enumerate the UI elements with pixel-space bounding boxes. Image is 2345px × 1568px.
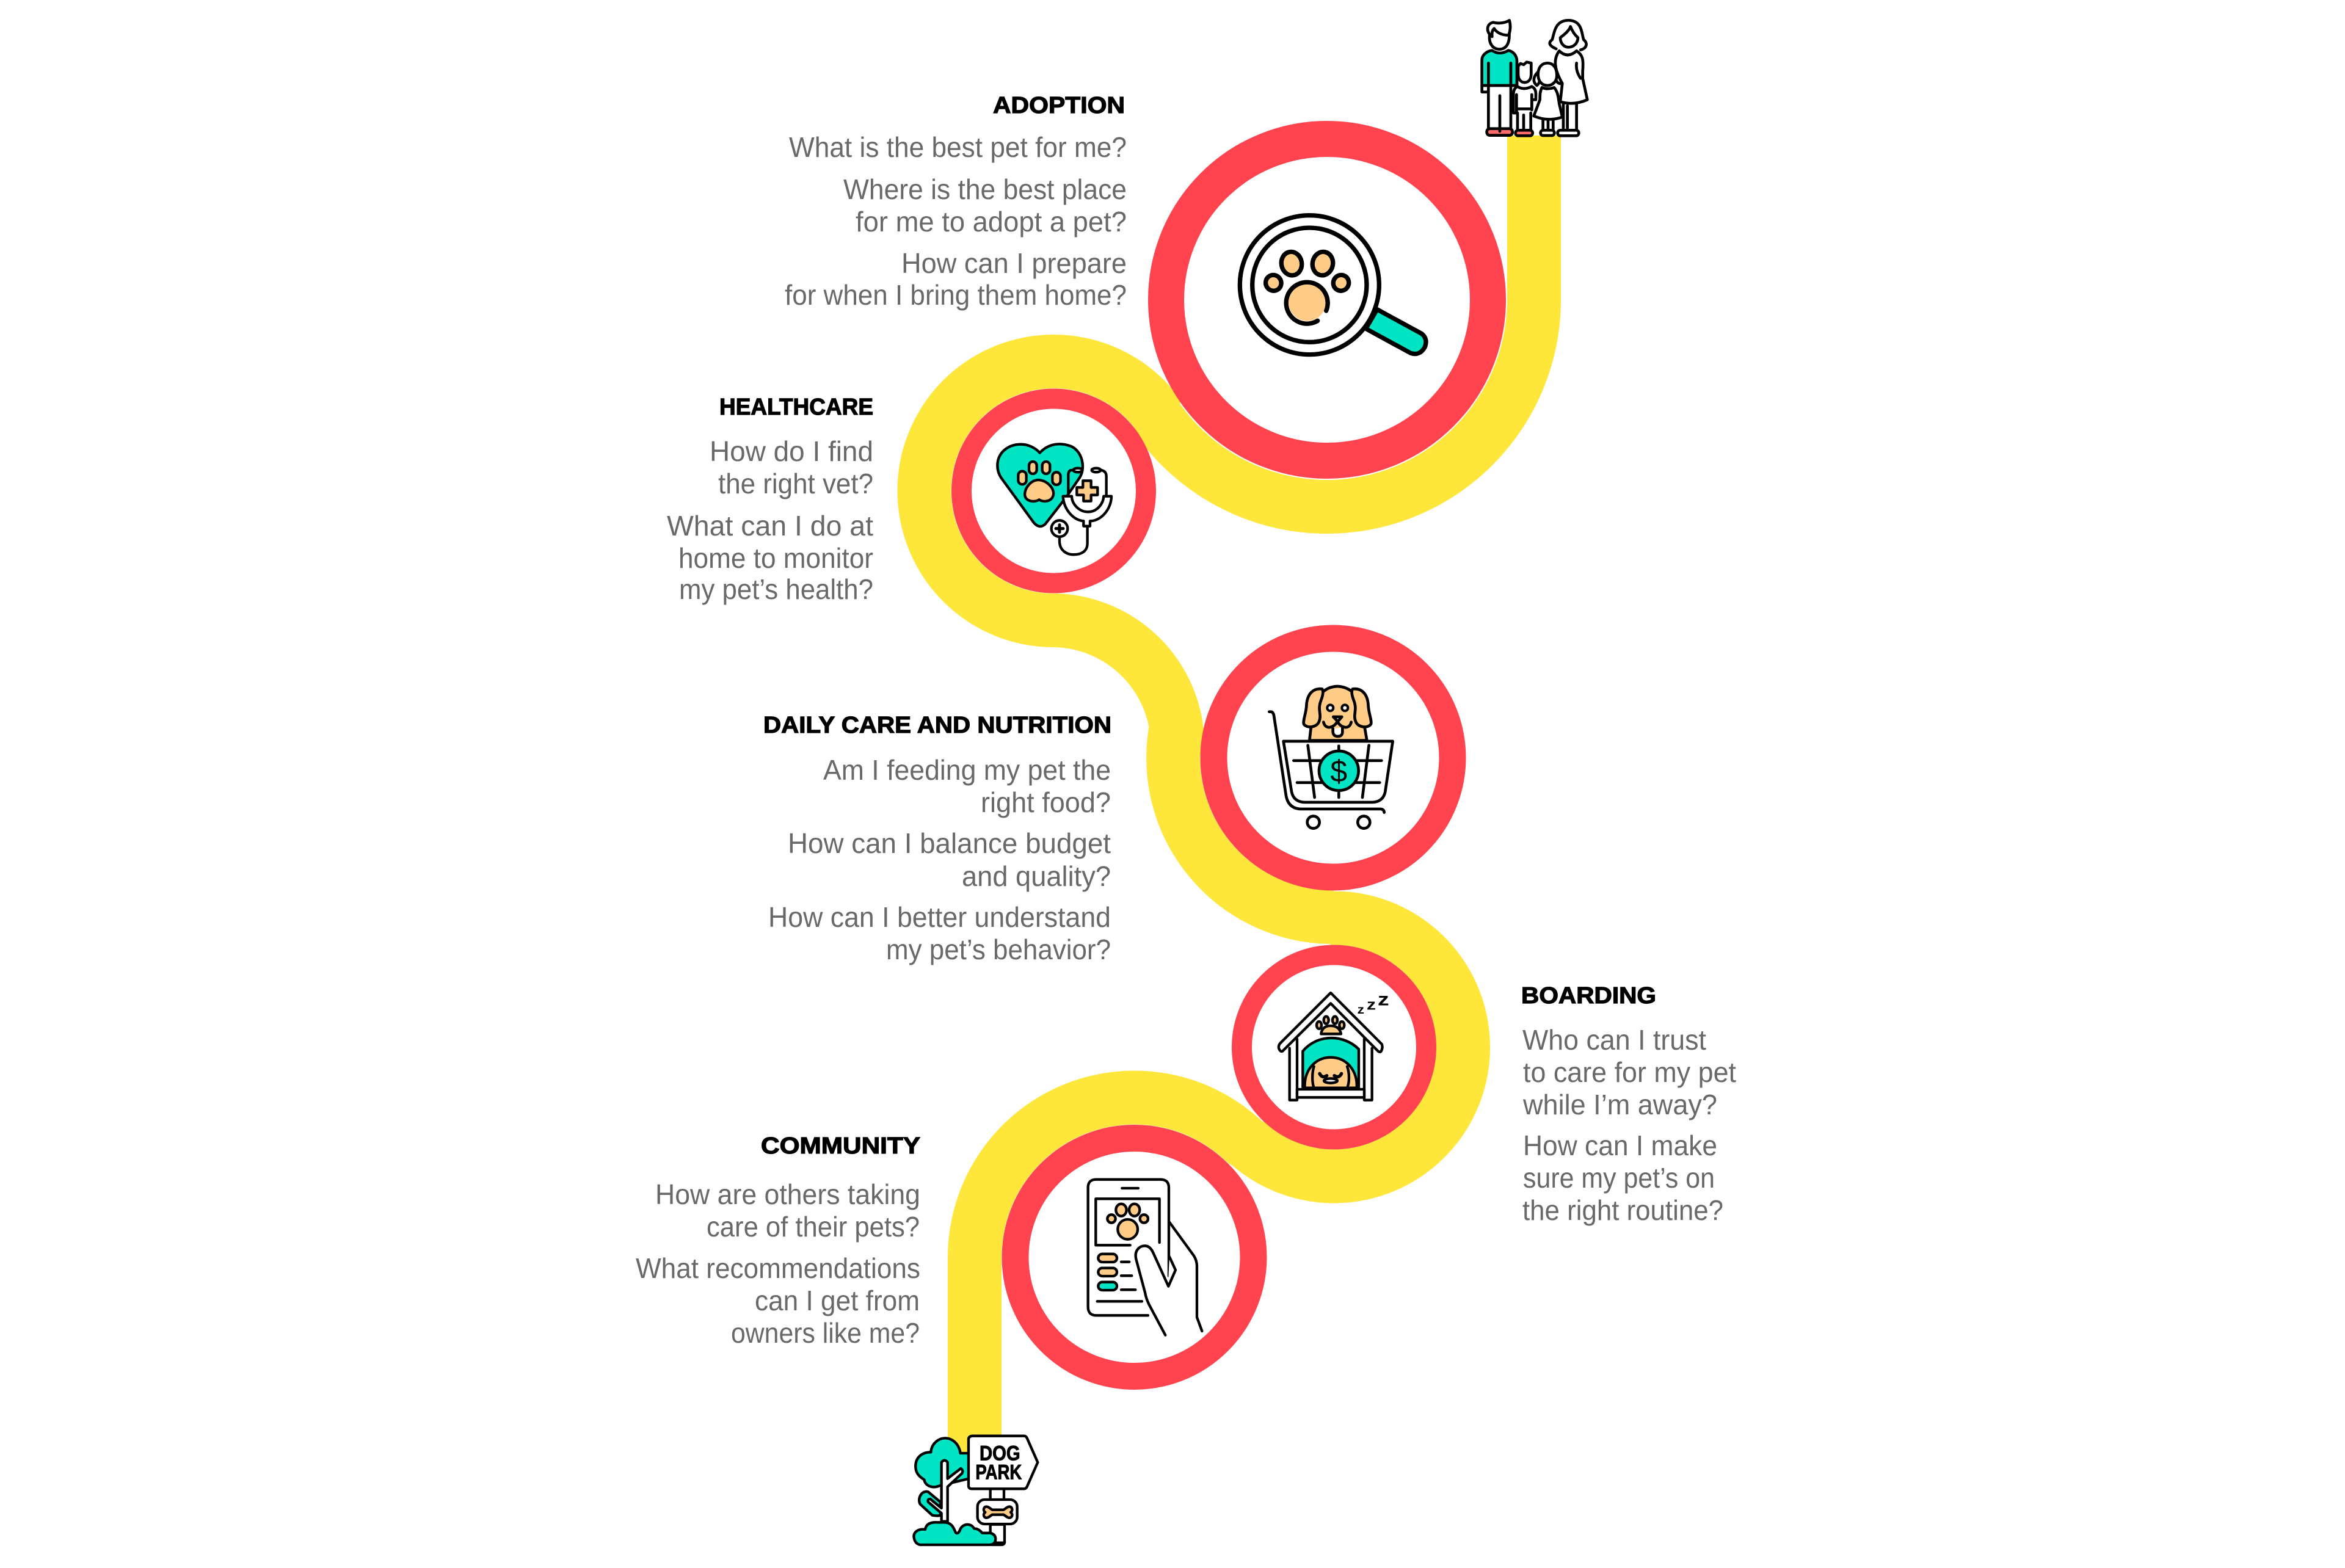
icon: dog park sign: PARK bbox=[975, 1461, 1022, 1484]
questions: adoption: Where is the best place bbox=[843, 173, 1127, 205]
questions: healthcare: home to monitor bbox=[678, 542, 873, 574]
questions: adoption bbox=[785, 131, 1127, 311]
text block: adoption bbox=[785, 93, 1127, 311]
questions: community: What recommendations bbox=[636, 1252, 920, 1284]
questions: boarding bbox=[1522, 1024, 1736, 1226]
questions: healthcare: What can I do at bbox=[667, 510, 873, 542]
questions: healthcare bbox=[667, 435, 873, 605]
questions: community: How are others taking bbox=[655, 1178, 920, 1210]
ring: healthcare bbox=[961, 399, 1146, 583]
text block: boarding bbox=[1521, 983, 1736, 1226]
questions: boarding: How can I make bbox=[1523, 1130, 1717, 1161]
text block: daily care and nutrition bbox=[763, 713, 1111, 965]
icon: dog park sign: DOG bbox=[980, 1442, 1020, 1465]
ring: community bbox=[1015, 1138, 1253, 1376]
questions: daily care: How can I balance budget bbox=[788, 827, 1111, 859]
heading: healthcare: HEALTHCARE bbox=[719, 394, 873, 420]
questions: daily care: and quality? bbox=[962, 860, 1111, 892]
ring: adoption bbox=[1166, 139, 1488, 460]
heading: boarding: BOARDING bbox=[1521, 983, 1656, 1009]
heading: daily care and nutrition: DAILY CARE AND NUTRITION bbox=[763, 713, 1111, 738]
icon: hand holding phone bbox=[1088, 1180, 1202, 1335]
questions: boarding: sure my pet’s on bbox=[1523, 1162, 1715, 1194]
questions: healthcare: How do I find bbox=[710, 435, 873, 467]
questions: daily care: How can I better understand bbox=[768, 901, 1111, 933]
icon: dog in shopping cart: $ bbox=[1330, 754, 1347, 788]
questions: healthcare: my pet’s health? bbox=[679, 573, 873, 605]
questions: adoption: for me to adopt a pet? bbox=[856, 206, 1127, 238]
ring: daily care bbox=[1214, 639, 1452, 877]
questions: daily care: right food? bbox=[981, 786, 1111, 818]
text block: healthcare bbox=[667, 394, 873, 605]
questions: daily care: Am I feeding my pet the bbox=[823, 754, 1111, 786]
questions: boarding: while I’m away? bbox=[1522, 1089, 1717, 1120]
icon: heart with stethoscope bbox=[997, 444, 1111, 554]
icon: dog in shopping cart bbox=[1269, 686, 1393, 829]
icon: dog house: z bbox=[1358, 1004, 1364, 1017]
questions: adoption: What is the best pet for me? bbox=[789, 131, 1127, 163]
questions: community: can I get from bbox=[755, 1285, 920, 1316]
heading: adoption: ADOPTION bbox=[993, 93, 1125, 118]
questions: daily care: my pet’s behavior? bbox=[886, 934, 1111, 965]
questions: boarding: to care for my pet bbox=[1523, 1056, 1736, 1088]
heading: community: COMMUNITY bbox=[761, 1133, 920, 1159]
questions: boarding: the right routine? bbox=[1522, 1194, 1723, 1226]
icon: dog house: z bbox=[1367, 996, 1376, 1013]
questions: adoption: How can I prepare bbox=[901, 247, 1127, 279]
icon: dog house bbox=[1279, 990, 1389, 1100]
questions: community: care of their pets? bbox=[707, 1211, 920, 1243]
questions: healthcare: the right vet? bbox=[718, 468, 873, 499]
icon: magnifying glass with paw bbox=[1240, 216, 1426, 355]
questions: community: owners like me? bbox=[731, 1317, 920, 1349]
icon: dog house: z bbox=[1378, 990, 1389, 1010]
questions: community bbox=[636, 1178, 920, 1349]
ring: boarding bbox=[1242, 955, 1427, 1139]
questions: adoption: for when I bring them home? bbox=[785, 279, 1127, 311]
questions: boarding: Who can I trust bbox=[1522, 1024, 1706, 1056]
icon: family bbox=[1482, 20, 1587, 136]
questions: daily care bbox=[768, 754, 1111, 965]
winding yellow path bbox=[925, 136, 1534, 1453]
text block: community bbox=[636, 1133, 920, 1349]
icon: dog park sign bbox=[914, 1436, 1038, 1545]
